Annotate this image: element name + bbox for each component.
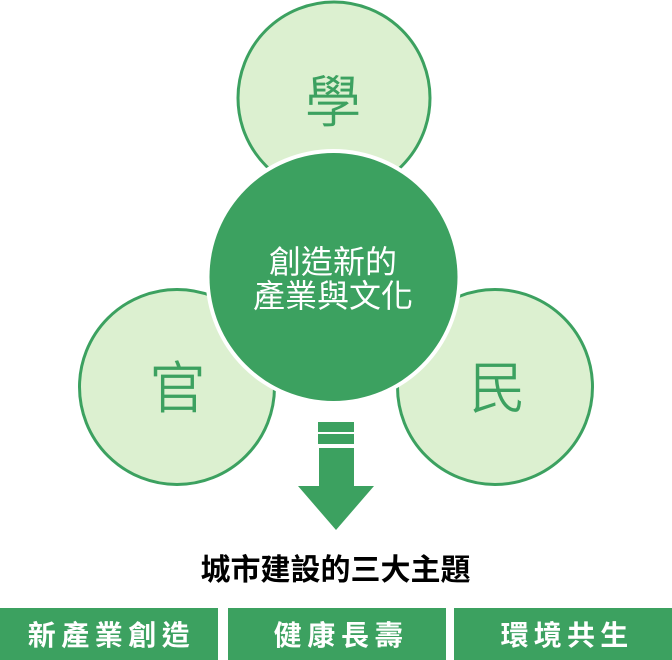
theme bar: environmental symbiosis bbox=[454, 608, 672, 660]
circle: 民 (citizens): 民 bbox=[470, 357, 526, 420]
central circle: creating new industry and culture bbox=[206, 149, 462, 405]
theme bar: health and longevity: 健康長壽 bbox=[274, 620, 408, 651]
theme bar: environmental symbiosis: 環境共生 bbox=[501, 620, 633, 651]
circle: 學 (academia): 學 bbox=[305, 71, 361, 134]
arrow: pointing down bbox=[298, 422, 374, 530]
circle: 學 (academia) bbox=[238, 2, 430, 194]
theme bar: new industry creation: 新產業創造 bbox=[28, 620, 195, 651]
circle: 官 (government) bbox=[80, 290, 274, 484]
central circle: creating new industry and culture: 創造新的 bbox=[269, 244, 397, 280]
theme bar: new industry creation bbox=[0, 608, 218, 660]
circle: 官 (government): 官 bbox=[150, 357, 206, 420]
theme bar: health and longevity bbox=[228, 608, 446, 660]
circle: 民 (citizens) bbox=[398, 290, 592, 484]
central circle: creating new industry and culture: 產業與文化 bbox=[253, 278, 413, 314]
heading: three major themes: 城市建設的三大主題 bbox=[200, 554, 470, 587]
